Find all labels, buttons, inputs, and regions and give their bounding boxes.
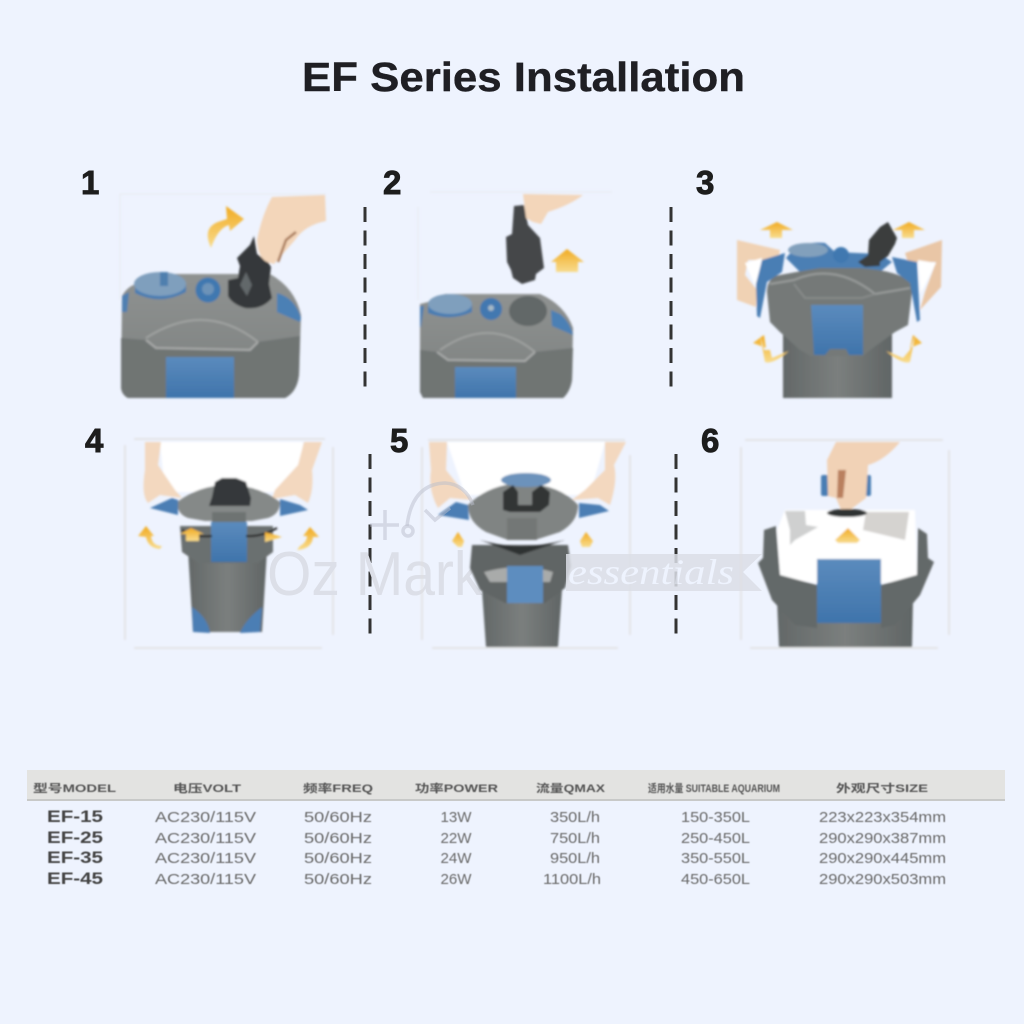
spec table header rule [27, 799, 1005, 801]
arrow inner right [265, 532, 282, 542]
hand [523, 194, 583, 224]
blue latch [817, 559, 881, 623]
canister [188, 550, 267, 632]
spec table header band [27, 770, 1005, 800]
row EF-25: AC230/115V [155, 830, 256, 847]
left arm [429, 442, 472, 508]
row EF-25: 750L/h [550, 830, 600, 847]
divider: row 2 right [674, 454, 678, 635]
curved arrow left [138, 526, 162, 549]
lid dark underside [480, 540, 565, 555]
front latch [811, 305, 863, 355]
canister body [121, 274, 301, 398]
black connector [228, 236, 272, 308]
row EF-45: EF-45 [47, 870, 103, 888]
open collar [470, 545, 571, 603]
black connector [858, 222, 897, 267]
right blue clip [892, 257, 920, 322]
canister [482, 590, 562, 647]
watermark ribbon: essentials [568, 552, 734, 592]
row EF-15: AC230/115V [155, 809, 256, 826]
divider: row 1 left [364, 207, 366, 388]
panel: step 4 [125, 439, 333, 648]
large blue knob [428, 294, 472, 317]
collar [180, 526, 273, 563]
small knob [833, 247, 849, 263]
arrow top left [760, 222, 793, 238]
step number 6: 6 [701, 422, 719, 459]
panel: step 6 [741, 440, 949, 648]
arrow top right [893, 222, 925, 238]
row EF-35: 950L/h [550, 850, 600, 867]
row EF-35: 24W [440, 850, 472, 867]
small blue knob [196, 278, 220, 302]
row EF-25: 290x290x387mm [819, 830, 946, 847]
step number 3: 3 [696, 164, 714, 201]
large blue knob [134, 272, 186, 299]
lid [468, 483, 578, 540]
header row [33, 781, 928, 795]
row EF-35: 350-550L [681, 850, 750, 867]
row EF-25: 250-450L [681, 830, 750, 847]
row EF-15 [47, 808, 946, 826]
arrow right [580, 532, 593, 547]
row EF-35 [47, 849, 946, 867]
row EF-25: 50/60Hz [304, 830, 372, 847]
row EF-45: 1100L/h [543, 871, 601, 888]
small blue knob [480, 298, 502, 320]
curved arrow left [753, 335, 789, 363]
row EF-45: AC230/115V [155, 871, 256, 888]
lid top highlight [770, 274, 910, 298]
panel: step 5 [422, 440, 630, 648]
front latch [507, 566, 543, 603]
watermark logo [370, 483, 473, 540]
left ear [150, 498, 178, 515]
right collar wall [881, 528, 934, 628]
up arrow [835, 528, 860, 543]
front latch [211, 522, 247, 562]
row EF-35: 290x290x445mm [819, 850, 946, 867]
white gaps behind hands [745, 258, 762, 290]
right hand [905, 240, 942, 310]
seal line [182, 528, 277, 536]
header row: 外观尺寸SIZE [836, 781, 928, 795]
step number 5: 5 [390, 422, 408, 459]
black connectors [503, 485, 550, 512]
spec table [33, 781, 946, 888]
blue top knob [501, 473, 551, 487]
header row: 功率POWER [415, 781, 498, 795]
header row: 电压VOLT [173, 781, 241, 795]
row EF-45: 50/60Hz [304, 871, 372, 888]
curved arrow [208, 206, 244, 248]
row EF-35: EF-35 [47, 849, 103, 867]
row EF-35: AC230/115V [155, 850, 256, 867]
row EF-25: 22W [440, 830, 472, 847]
hand [827, 442, 900, 512]
watermark wordmark: Oz Market [267, 540, 530, 609]
panel: step 2 [418, 192, 612, 398]
white backdrop [447, 442, 605, 495]
left collar wall [758, 526, 817, 628]
canister [777, 600, 913, 647]
right ear [579, 503, 609, 518]
right ear [280, 499, 308, 516]
row EF-15: 13W [440, 809, 472, 826]
header row: 型号MODEL [33, 782, 116, 795]
blue feet [192, 607, 262, 633]
lid front notch [212, 512, 246, 526]
panel: step 1 [120, 194, 326, 398]
row EF-45 [47, 870, 946, 888]
row EF-15: 350L/h [550, 809, 600, 826]
row EF-25 [47, 829, 946, 847]
blue rim and gray dial [786, 243, 892, 272]
collar inside [484, 567, 553, 582]
left ear [438, 502, 469, 520]
right arm [272, 442, 322, 503]
black connectors [209, 478, 251, 506]
row EF-45: 26W [440, 871, 472, 888]
row EF-15: EF-15 [47, 808, 103, 826]
left hand [737, 240, 780, 307]
row EF-15: 50/60Hz [304, 809, 372, 826]
filter opening [509, 296, 547, 326]
curved arrow right [297, 527, 319, 550]
black disc [827, 509, 867, 517]
panel: step 3 [737, 222, 942, 398]
row EF-45: 290x290x503mm [819, 871, 946, 888]
title: EF Series Installation [302, 54, 745, 100]
canister body [420, 294, 573, 398]
lid [177, 485, 280, 521]
header row: 适用水量 SUITABLE AQUARIUM [648, 781, 780, 795]
white filter media [777, 510, 917, 583]
row EF-25: EF-25 [47, 829, 103, 847]
filter media fold right [863, 512, 909, 540]
blue cylinder [821, 475, 871, 496]
black connector held up [506, 205, 544, 284]
white backdrop [160, 442, 303, 492]
step number 1: 1 [81, 164, 99, 201]
curved arrow right [886, 335, 922, 363]
divider: row 1 right [670, 207, 672, 388]
filter media fold left [785, 511, 818, 545]
right arm [572, 442, 626, 505]
step number 4: 4 [85, 422, 104, 459]
step number 2: 2 [383, 164, 401, 201]
row EF-15: 150-350L [681, 809, 750, 826]
row EF-35: 50/60Hz [304, 850, 372, 867]
row EF-15: 223x223x354mm [819, 809, 946, 826]
arrow inner left [180, 528, 204, 541]
lid front notch [507, 518, 537, 540]
header row: 流量QMAX [536, 781, 606, 795]
canister lid and collar [767, 268, 912, 356]
hand [257, 195, 326, 264]
left arm [144, 442, 182, 503]
canister lower [783, 325, 892, 398]
header row: 频率FREQ [303, 781, 374, 795]
up arrow [551, 249, 584, 272]
arrow left [452, 532, 464, 547]
left blue clip [756, 253, 785, 318]
row EF-45: 450-650L [681, 871, 750, 888]
divider: row 2 left [368, 454, 372, 635]
